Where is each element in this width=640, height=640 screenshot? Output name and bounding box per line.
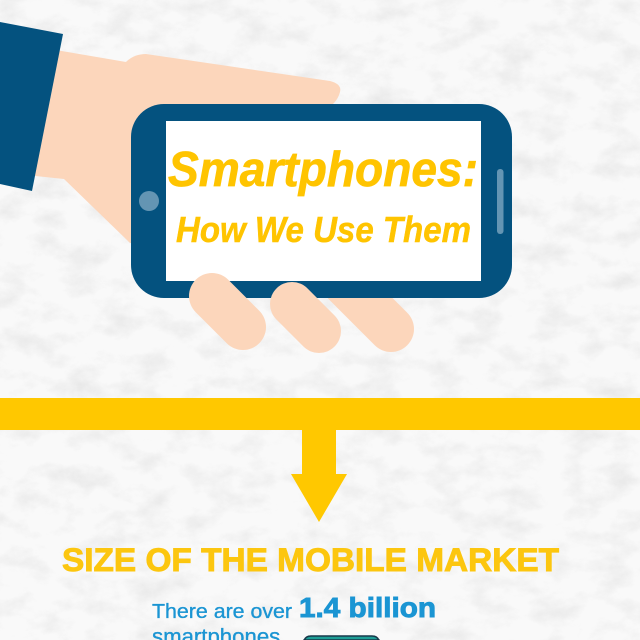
section heading: SIZE OF THE MOBILE MARKET [62, 542, 559, 578]
home button [139, 191, 159, 211]
icon: teal phone top [304, 636, 379, 640]
phone screen [166, 121, 481, 281]
yellow divider with down arrow [0, 398, 640, 522]
statistic text: 1.4 billion [299, 592, 436, 623]
statistic text: There are over [152, 601, 292, 623]
screen title and subtitle: Smartphones: [168, 143, 478, 197]
screen title and subtitle: How We Use Them [176, 209, 471, 250]
screen title and subtitle [168, 143, 478, 250]
sleeve cuff [0, 22, 63, 191]
hand and wrist [26, 49, 340, 243]
first finger [212, 296, 243, 327]
second finger [292, 304, 319, 331]
phone body [131, 104, 512, 298]
arrow [291, 428, 347, 522]
statistic text [152, 592, 436, 623]
third finger behind phone [345, 283, 391, 329]
illustration: hand holding smartphone [0, 22, 512, 331]
side slider [497, 169, 504, 234]
